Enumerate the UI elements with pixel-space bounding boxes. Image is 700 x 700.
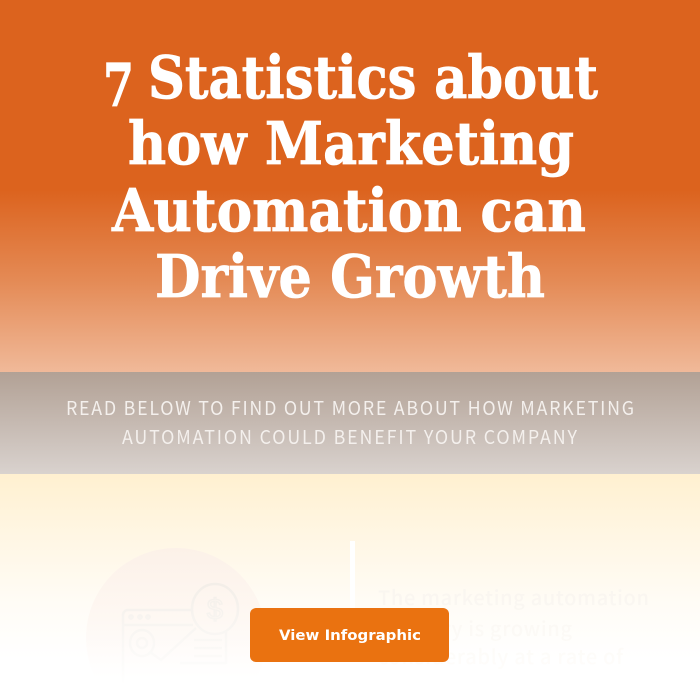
faded statistic text: industry is growing <box>378 613 572 642</box>
subtitle: AUTOMATION COULD BENEFIT YOUR COMPANY <box>122 423 577 450</box>
header panel <box>0 0 700 372</box>
faded statistic text: considerably at a rate of <box>378 641 624 670</box>
title: Automation can <box>111 176 586 245</box>
lower content panel <box>0 474 700 700</box>
icon: webpage with dollar coin: $ <box>207 594 223 626</box>
icon: webpage with dollar coin <box>123 584 238 690</box>
button: View Infographic: View Infographic <box>279 628 421 644</box>
subtitle band <box>0 372 700 474</box>
button: View Infographic <box>250 608 449 662</box>
title: 7 <box>103 51 134 120</box>
title: Drive Growth <box>155 242 545 311</box>
icon circle <box>86 548 266 700</box>
subtitle <box>66 394 634 450</box>
title: how Marketing <box>128 109 574 178</box>
faded statistic text <box>378 582 649 670</box>
divider line <box>350 541 355 611</box>
title: Statistics about <box>148 43 598 112</box>
title <box>103 43 598 311</box>
subtitle: READ BELOW TO FIND OUT MORE ABOUT HOW MARKETING <box>66 394 634 421</box>
faded statistic text: The marketing automation <box>378 582 649 611</box>
